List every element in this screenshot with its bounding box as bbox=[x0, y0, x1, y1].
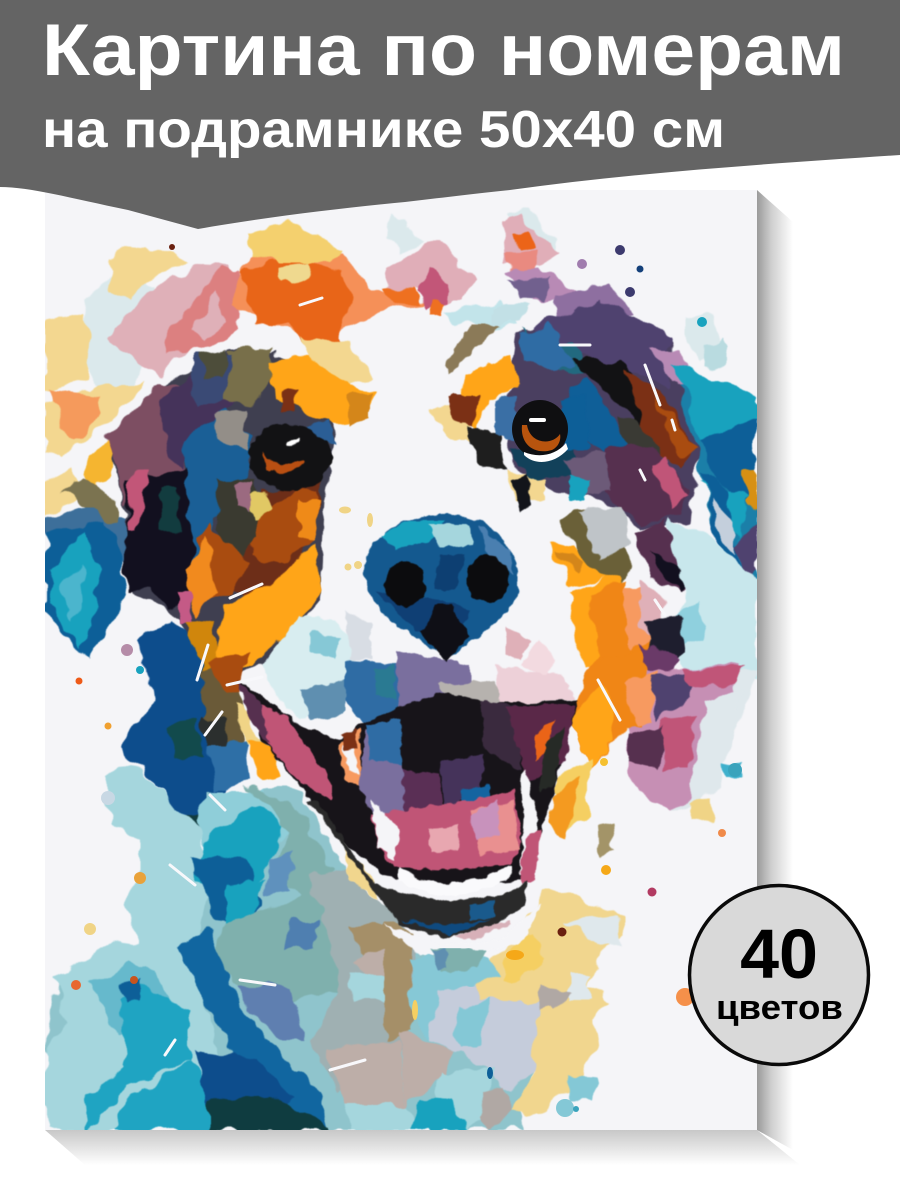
badge caption: цветов bbox=[716, 989, 843, 1027]
right fringe: rose and purple splash bbox=[548, 650, 745, 840]
subtitle: на подрамнике 50х40 см bbox=[42, 101, 725, 159]
icon: right eye bbox=[512, 400, 568, 462]
right eye markings bbox=[430, 325, 610, 512]
paint splashes: top and background bbox=[45, 205, 725, 518]
right head: ear, black patch, purple bbox=[505, 300, 757, 580]
left head: dark ear and blue fur bbox=[105, 345, 335, 690]
icon: nose bbox=[363, 514, 518, 662]
yellow splash bbox=[475, 822, 625, 1115]
left ear bbox=[45, 478, 130, 660]
right cheek bbox=[546, 505, 757, 810]
mouth bbox=[238, 680, 578, 900]
brush highlights bbox=[165, 298, 675, 1070]
badge: 40 colours bbox=[690, 886, 868, 1064]
left face colours bbox=[180, 335, 372, 745]
badge number: 40 bbox=[740, 915, 818, 993]
chest and neck paint bbox=[45, 765, 545, 1130]
muzzle fur bbox=[262, 610, 575, 735]
collar fringe bbox=[410, 950, 500, 985]
canvas shadow bbox=[45, 190, 800, 1165]
title: Картина по номерам bbox=[42, 10, 845, 91]
left neck: dark blue splash bbox=[122, 620, 282, 835]
small paint dots bbox=[71, 244, 742, 1117]
chin bbox=[308, 800, 540, 955]
icon: left eye bbox=[235, 420, 335, 520]
header banner bbox=[0, 0, 900, 229]
painted canvas: dog portrait bbox=[45, 190, 757, 1130]
